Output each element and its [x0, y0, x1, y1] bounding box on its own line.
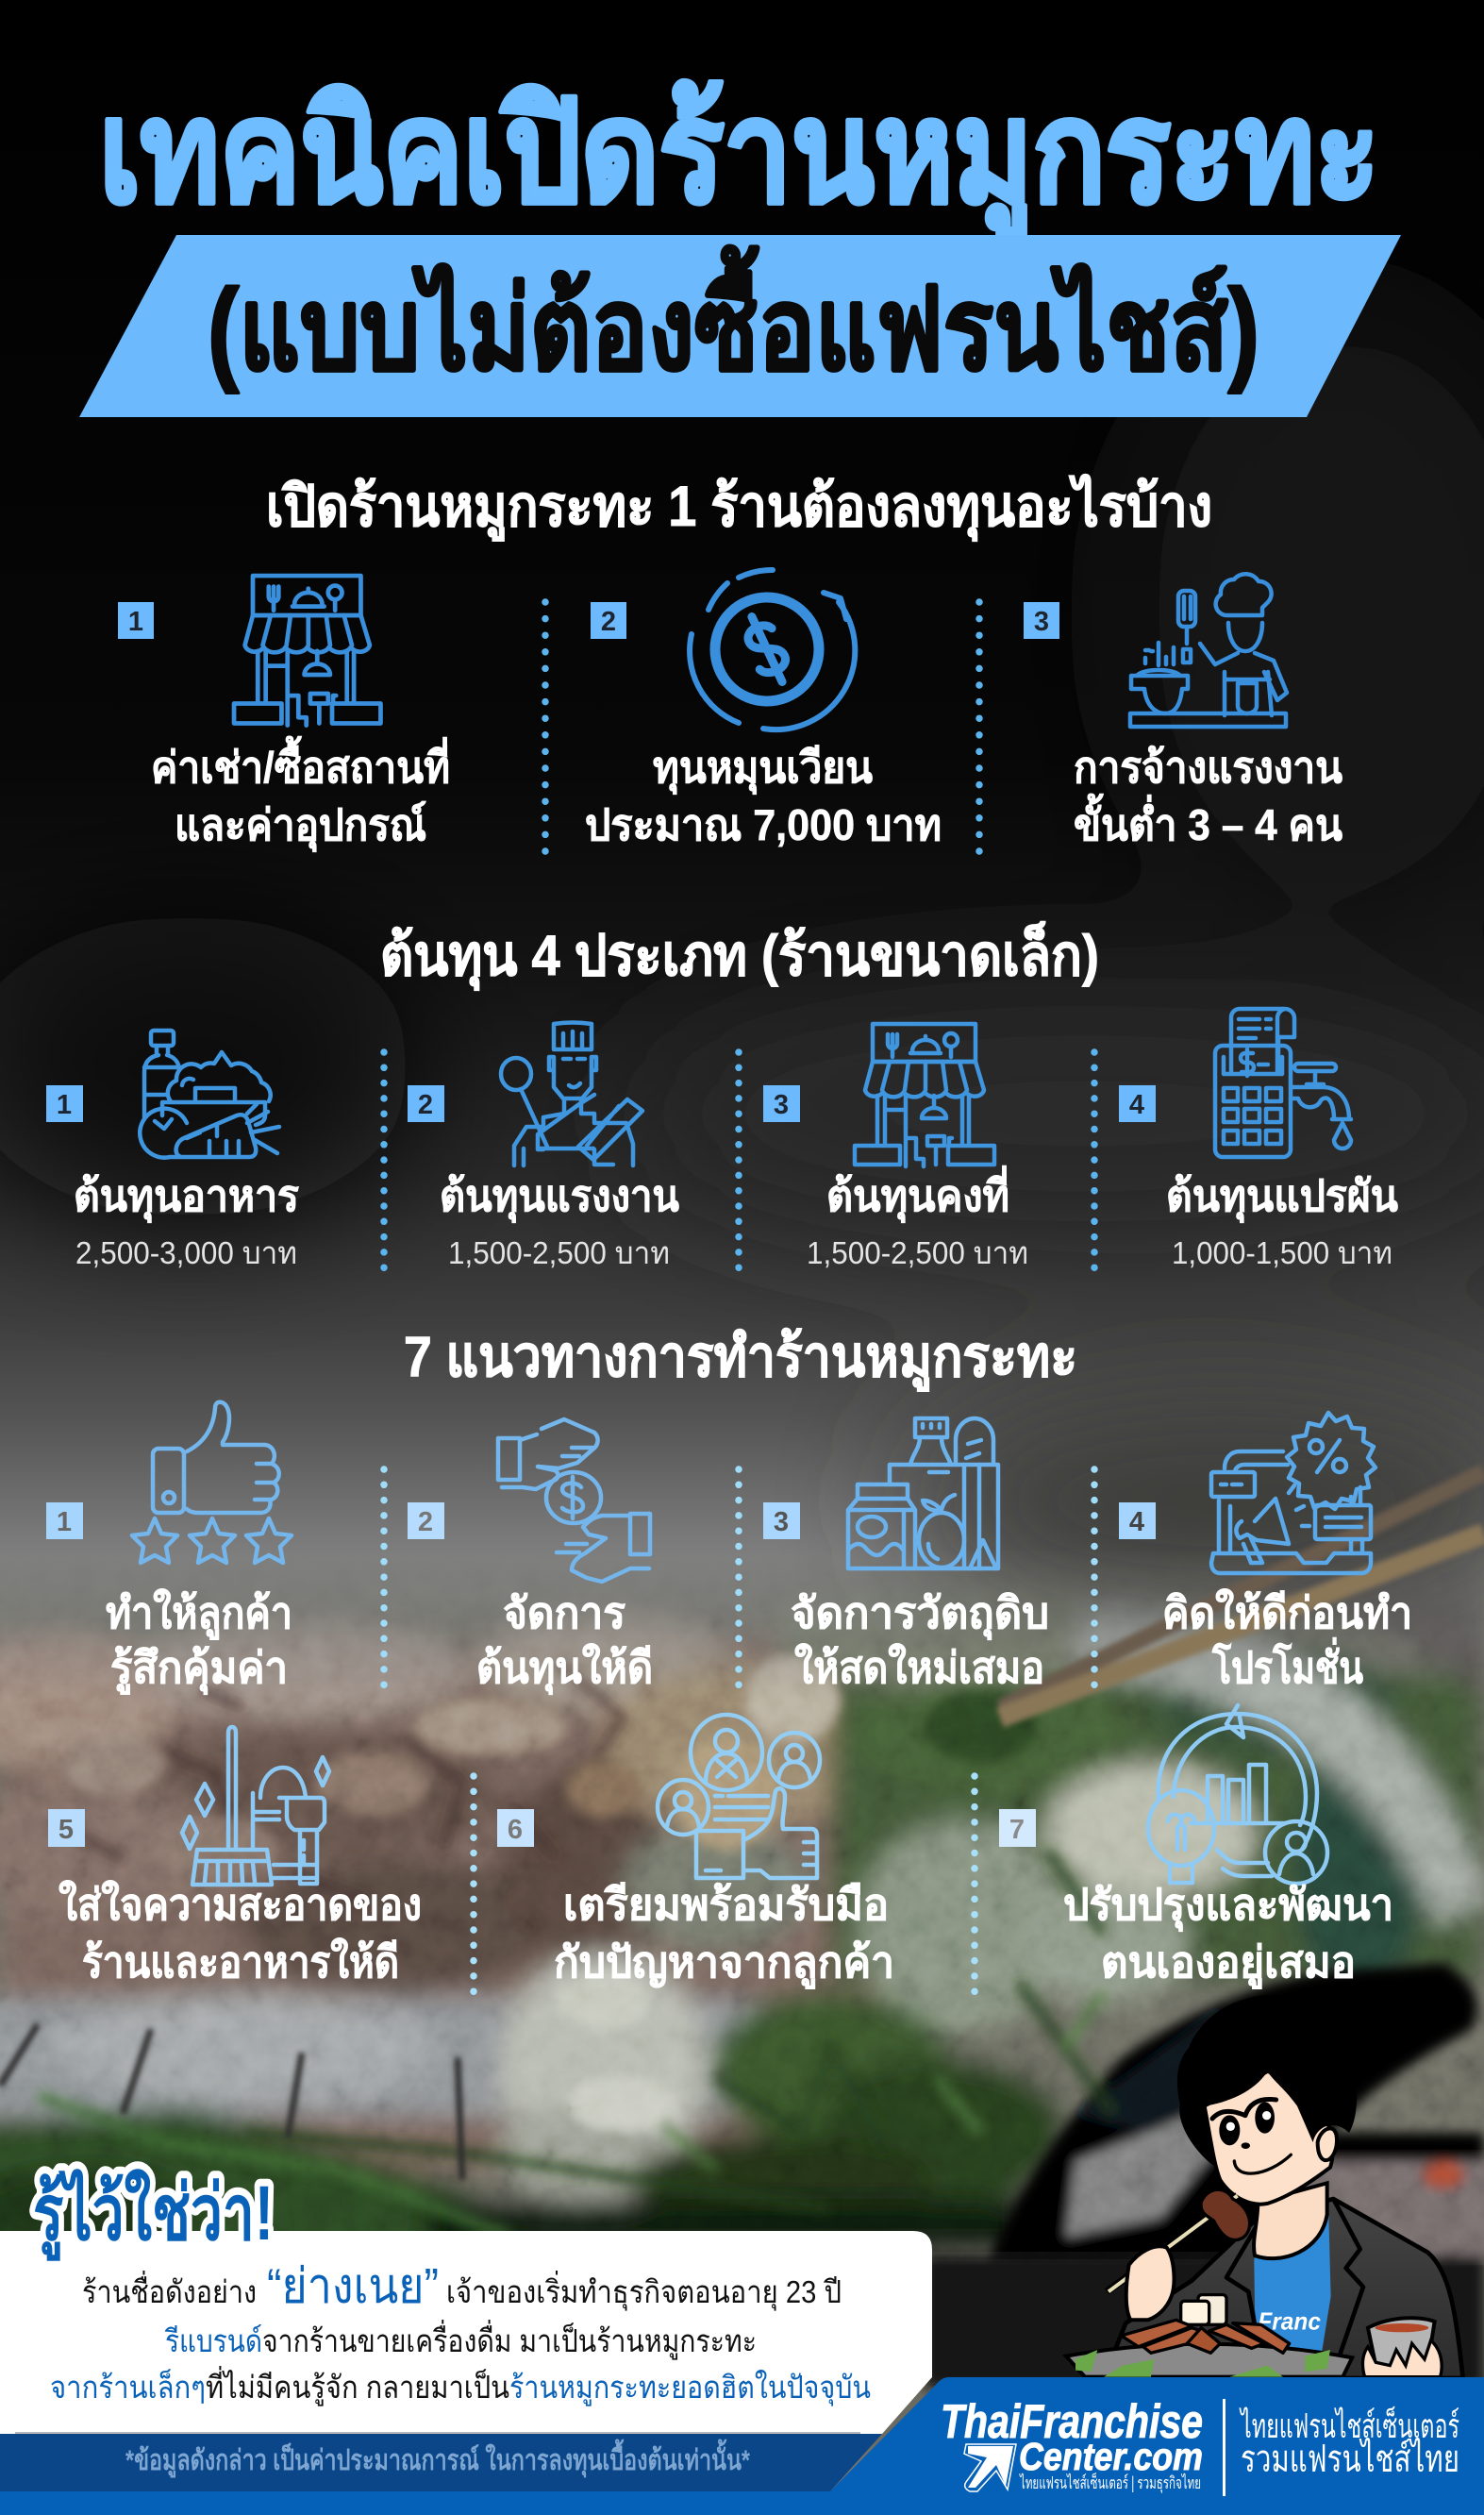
sauce cup and hand [1362, 2318, 1442, 2377]
icon: improvement cycle [1148, 1705, 1327, 1884]
item 2: working capital: ประมาณ 7,000 บาท [585, 800, 942, 849]
guideline 3 [763, 1418, 1049, 1692]
cost 4: variable: 4 [1129, 1090, 1144, 1120]
icon: thumbs up with stars [132, 1402, 292, 1563]
subtitle banner: (แบบไม่ต้องซื้อแฟรนไชส์) [208, 245, 1259, 394]
grill plate [1066, 2344, 1352, 2377]
icon: customer service [658, 1715, 820, 1878]
item 2: working capital: 2 [601, 607, 616, 637]
icon: chef with knife [501, 1023, 642, 1165]
guideline 6: 6 [508, 1815, 523, 1845]
guideline 1: รู้สึกคุ้มค่า [110, 1643, 288, 1695]
guideline 4: 4 [1129, 1507, 1144, 1537]
guideline 7 [999, 1705, 1393, 1989]
cost 1: food [46, 1031, 299, 1270]
icon: promotion [1211, 1413, 1376, 1573]
cost 1: food: ต้นทุนอาหาร [74, 1171, 299, 1223]
lapels [1226, 2199, 1363, 2378]
item 3: staff: ขั้นต่ำ 3 – 4 คน [1074, 793, 1343, 849]
guideline 5: 5 [58, 1815, 74, 1845]
guideline 2: ต้นทุนให้ดี [476, 1642, 653, 1695]
guideline 1 [46, 1402, 292, 1695]
item 2: working capital: ทุนหมุนเวียน [653, 743, 874, 795]
guideline 2: 2 [418, 1507, 433, 1537]
cost 2: labor [408, 1023, 680, 1270]
cost 4: variable: 1,000-1,500 บาท [1172, 1235, 1392, 1270]
logo: ThaiFranchise Center.com: Center.com [1019, 2435, 1203, 2478]
logo: ThaiFranchise Center.com: ThaiFranchise [941, 2395, 1203, 2448]
disclaimer band [0, 2434, 882, 2491]
item 1: rent and equipment: ค่าเช่า/ซื้อสถานที่ [151, 735, 450, 792]
guideline 6: เตรียมพร้อมรับมือ [563, 1880, 889, 1929]
disclaimer band: *ข้อมูลดังกล่าว เป็นค่าประมาณการณ์ ในการลงทุนเบื้องต้นเท่านั้น* [125, 2439, 750, 2478]
guideline 1: ทำให้ลูกค้า [106, 1587, 292, 1640]
guideline 2 [408, 1419, 653, 1695]
callout text: รีแบรนด์ [164, 2323, 262, 2358]
guideline 7: 7 [1009, 1815, 1025, 1845]
callout text: จากร้านขายเครื่องดื่ม มาเป็นร้านหมูกระทะ [262, 2320, 757, 2360]
t-shirt [1254, 2215, 1331, 2378]
footer: logo band [0, 2377, 1484, 2515]
cost 2: labor: ต้นทุนแรงงาน [440, 1171, 680, 1223]
heading: investment: เปิดร้านหมูกระทะ 1 ร้านต้องลงทุนอะไรบ้าง [266, 473, 1212, 542]
guideline 6: กับปัญหาจากลูกค้า [554, 1937, 894, 1989]
callout text [50, 2259, 871, 2406]
cost 3: fixed: ต้นทุนคงที่ [826, 1165, 1009, 1223]
guideline 5: ใส่ใจความสะอาดของ [58, 1879, 422, 1929]
guideline 5: ร้านและอาหารให้ดี [82, 1937, 399, 1987]
cost 1: food: 1 [57, 1090, 72, 1120]
shirt logo text: Franc [1258, 2306, 1321, 2335]
guideline 4: คิดให้ดีก่อนทำ [1162, 1587, 1412, 1637]
cost 2: labor: 2 [418, 1090, 433, 1120]
icon: groceries [140, 1031, 279, 1158]
item 2: working capital [585, 570, 942, 849]
icon: bill and tap [1215, 1009, 1351, 1157]
item 1: rent and equipment: 1 [128, 607, 143, 637]
cost 4: variable [1119, 1009, 1399, 1270]
photo detail: meat crevices and highlights [57, 1661, 623, 1902]
cost 3: fixed [763, 1024, 1028, 1270]
guideline 5 [48, 1727, 422, 1987]
icon: coin cycle [690, 570, 855, 729]
guideline 2: จัดการ [503, 1588, 625, 1637]
item 1: rent and equipment: และค่าอุปกรณ์ [175, 800, 426, 852]
guideline 4: โปรโมชั่น [1211, 1637, 1363, 1692]
item 3: staff: การจ้างแรงงาน [1074, 743, 1343, 792]
guideline 3: ให้สดใหม่เสมอ [794, 1642, 1044, 1692]
mascot: cartoon man eating grilled pork [1066, 1995, 1463, 2378]
callout text: จากร้านเล็กๆ [50, 2369, 206, 2405]
icon: storefront [234, 576, 380, 726]
ear [1318, 2128, 1337, 2160]
cost 2: labor: 1,500-2,500 บาท [448, 1235, 670, 1270]
guideline 6 [497, 1715, 894, 1989]
jacket [1104, 2199, 1463, 2378]
callout title: รู้ไว้ใช่ว่า! [33, 2169, 274, 2261]
cost 1: food: 2,500-3,000 บาท [75, 1235, 297, 1270]
face [1205, 2071, 1333, 2205]
item 3: staff [1024, 574, 1343, 849]
guideline 7: ตนเองอยู่เสมอ [1101, 1937, 1356, 1989]
brand tagline [1239, 2405, 1459, 2480]
icon: storefront [855, 1024, 994, 1166]
subtitle banner [79, 235, 1401, 417]
callout text: ร้านหมูกระทะยอดฮิตในปัจจุบัน [509, 2370, 871, 2406]
callout text: เจ้าของเริ่มทำธุรกิจตอนอายุ 23 ปี [446, 2271, 842, 2311]
logo: ThaiFranchise Center.com [941, 2395, 1203, 2493]
chopsticks and meat [1107, 2189, 1250, 2291]
guideline 3: จัดการวัตถุดิบ [791, 1588, 1049, 1640]
pork slices [1121, 2320, 1290, 2353]
guideline 3: 3 [774, 1507, 789, 1537]
greens [1075, 2350, 1330, 2377]
heading: four cost types: ต้นทุน 4 ประเภท (ร้านขนาดเล็ก) [380, 921, 1099, 991]
logo: ThaiFranchise Center.com: ไทยแฟรนไชส์เซ็นเตอร์ | รวมธุรกิจไทย [1019, 2472, 1201, 2493]
cost 4: variable: ต้นทุนแปรผัน [1166, 1171, 1399, 1223]
tofu [1181, 2295, 1226, 2324]
eyes, brows, nose, mouth [1212, 2100, 1291, 2173]
hand [1126, 2246, 1174, 2320]
callout text: ที่ไม่มีคนรู้จัก กลายมาเป็น [206, 2366, 509, 2406]
hair [1177, 1995, 1357, 2166]
callout text: ร้านชื่อดังอย่าง [82, 2271, 257, 2309]
cost 3: fixed: 1,500-2,500 บาท [807, 1235, 1028, 1270]
icon: chef cooking [1130, 574, 1287, 727]
icon: hands exchanging money [498, 1419, 650, 1582]
callout text: “ย่างเนย” [267, 2259, 439, 2314]
neck [1254, 2183, 1327, 2258]
icon: grocery bag [848, 1418, 998, 1568]
icon: arrow [964, 2444, 1016, 2491]
cost 3: fixed: 3 [774, 1090, 789, 1120]
guideline 1: 1 [57, 1507, 72, 1537]
guideline 4 [1119, 1413, 1412, 1692]
heading: seven guidelines: 7 แนวทางการทำร้านหมูกระทะ [404, 1325, 1077, 1392]
item 1: rent and equipment [118, 576, 450, 852]
guideline 7: ปรับปรุงและพัฒนา [1063, 1880, 1393, 1932]
icon: cleaning tools [182, 1727, 329, 1885]
item 3: staff: 3 [1034, 607, 1049, 637]
callout panel [0, 2169, 932, 2434]
